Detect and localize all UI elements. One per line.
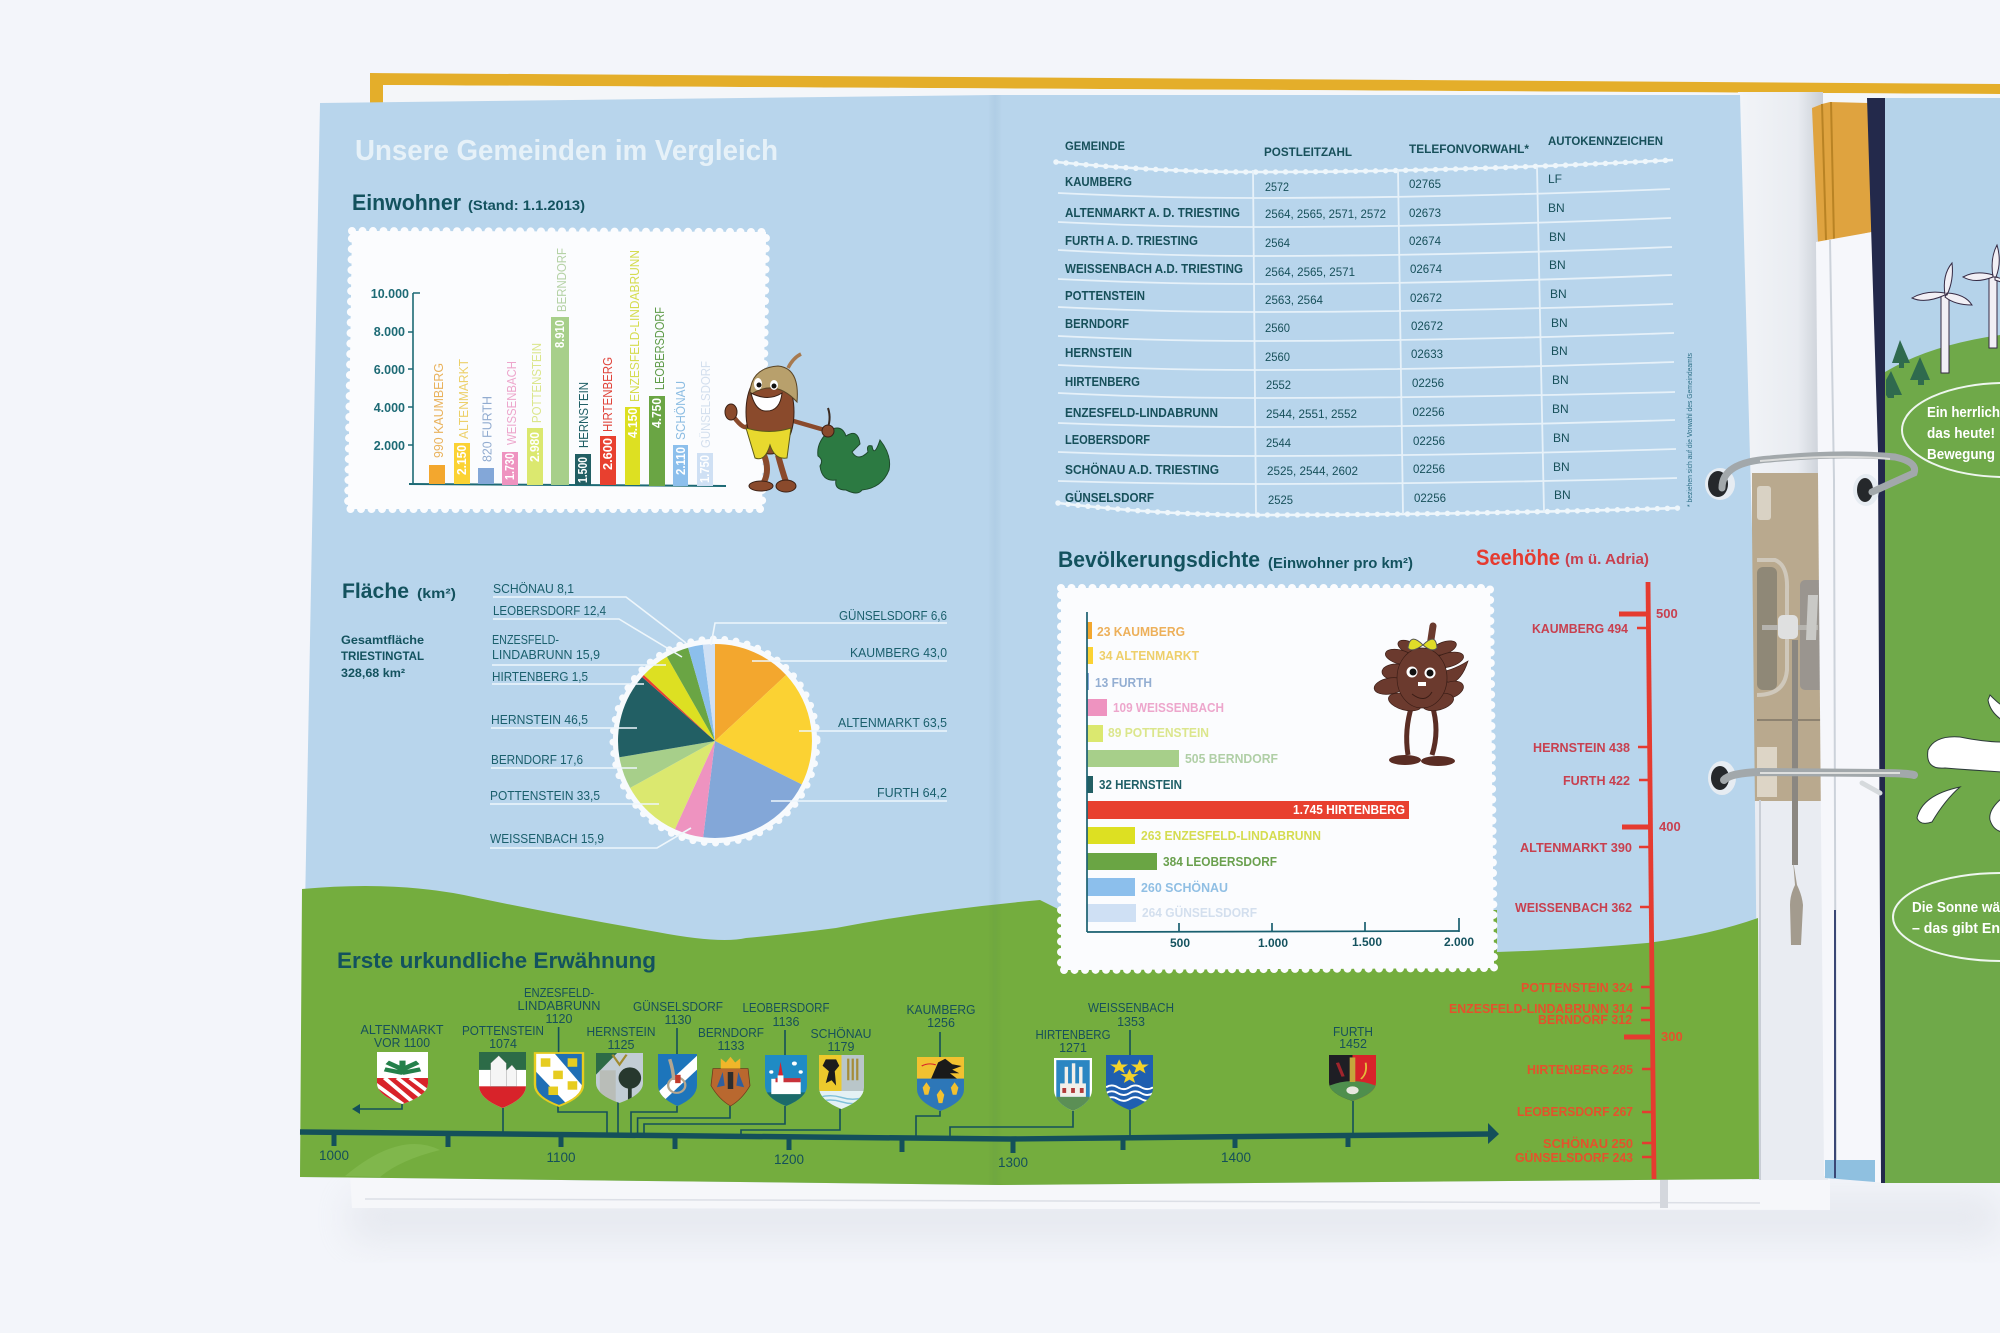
telephone codes: 02256 — [1414, 491, 1446, 505]
bar name labels: BERNDORF — [555, 248, 569, 312]
timeline labels: BERNDORF — [698, 1026, 764, 1040]
bar values: 1.750 — [698, 455, 712, 483]
legs — [764, 455, 786, 482]
density axis labels: 2.000 — [1444, 935, 1474, 949]
bar name labels: LEOBERSDORF — [653, 307, 667, 390]
panel: next page with wind turbines — [1885, 98, 2000, 1183]
altitude labels on hill: LEOBERSDORF 267 — [1517, 1105, 1633, 1119]
licence plates: BN — [1549, 258, 1566, 272]
icon: coat of arms Hernstein — [596, 1053, 643, 1103]
altitude labels on hill: POTTENSTEIN 324 — [1521, 981, 1633, 995]
callout: sunny day: das heute! — [1927, 425, 1995, 442]
timeline year labels: 1100 — [546, 1150, 576, 1165]
table header: TELEFONVORWAHL* — [1409, 142, 1529, 156]
density labels: 23 KAUMBERG — [1097, 625, 1185, 639]
telephone codes: 02673 — [1409, 206, 1441, 220]
pie labels: BERNDORF 17,6 — [491, 752, 583, 767]
icon: wind turbine — [1912, 263, 1972, 373]
altitude labels on sky: HERNSTEIN 438 — [1533, 741, 1630, 755]
footnote: * beziehen sich auf die Vorwahl des Gemeindeamts — [1685, 353, 1694, 507]
municipality names: LEOBERSDORF — [1065, 433, 1150, 447]
telephone codes: 02672 — [1410, 291, 1442, 305]
green hill — [300, 886, 1759, 1185]
licence plates: LF — [1548, 172, 1562, 186]
licence plates: BN — [1551, 344, 1568, 358]
bar values: 8.910 — [553, 320, 567, 348]
licence plates: BN — [1553, 431, 1570, 445]
municipality names: HIRTENBERG — [1065, 375, 1140, 389]
pie labels: HIRTENBERG 1,5 — [492, 669, 588, 684]
altitude labels on sky: ALTENMARKT 390 — [1520, 841, 1632, 855]
postal codes: 2564 — [1265, 236, 1290, 250]
density labels: 384 LEOBERSDORF — [1163, 855, 1277, 869]
municipality names: ALTENMARKT A. D. TRIESTING — [1065, 206, 1240, 220]
timeline labels: HERNSTEIN — [586, 1025, 656, 1039]
bar values: 4.750 — [650, 398, 664, 428]
bar values: 2.150 — [455, 445, 469, 475]
altitude labels on hill: ENZESFELD-LINDABRUNN 314 — [1449, 1002, 1633, 1016]
heading: Einwohner: (Stand: 1.1.2013) — [468, 197, 585, 213]
bar name labels: SCHÖNAU — [674, 381, 688, 440]
right pages stack — [1812, 98, 1886, 1183]
heading: Bevölkerungsdichte — [1058, 547, 1413, 572]
axis labels: 6.000 — [374, 363, 405, 377]
density labels: 109 WEISSENBACH — [1113, 701, 1224, 715]
timeline labels: 1271 — [1059, 1041, 1087, 1055]
altitude labels on hill: SCHÖNAU 250 — [1543, 1136, 1633, 1151]
municipality names: KAUMBERG — [1065, 175, 1132, 189]
telephone codes — [1409, 177, 1446, 505]
timeline labels: ENZESFELD- — [524, 986, 594, 1000]
telephone codes: 02256 — [1413, 462, 1445, 476]
timeline labels: VOR 1100 — [374, 1036, 430, 1050]
callout: sunny day — [1902, 383, 2000, 477]
table wavy rules — [1056, 160, 1680, 515]
timeline year labels — [319, 1148, 1251, 1170]
arms — [733, 416, 828, 431]
postal codes: 2560 — [1265, 350, 1290, 364]
altitude major labels: 300 — [1661, 1029, 1683, 1044]
bar name labels — [432, 248, 713, 462]
density labels: 1.745 HIRTENBERG — [1293, 803, 1405, 817]
icon: coat of arms Kaumberg — [917, 1057, 964, 1111]
timeline connectors — [360, 1027, 1353, 1138]
density bars — [1087, 622, 1409, 922]
bar name labels: POTTENSTEIN — [530, 343, 544, 423]
icon: coat of arms Altenmarkt — [377, 1052, 428, 1104]
chart: Seehöhe altitude scale — [1449, 545, 1683, 1179]
face — [754, 378, 762, 390]
bar values: 1.730 — [503, 453, 517, 480]
density labels: 264 GÜNSELSDORF — [1142, 905, 1257, 920]
axis labels: 4.000 — [374, 401, 405, 415]
pie labels: KAUMBERG 43,0 — [850, 645, 947, 660]
telephone codes: 02765 — [1409, 177, 1441, 191]
panel: table of municipalities — [1056, 134, 1680, 515]
telephone codes: 02674 — [1409, 234, 1441, 248]
bar values: 1.500 — [576, 457, 590, 483]
timeline labels: 1136 — [773, 1015, 799, 1029]
heading: Fläche: Fläche — [342, 580, 409, 603]
icon: coat of arms Berndorf — [711, 1057, 750, 1106]
timeline labels — [360, 986, 1373, 1055]
icon: coat of arms Schönau — [819, 1055, 864, 1109]
body — [746, 370, 794, 454]
postal codes: 2572 — [1265, 180, 1289, 194]
table header: GEMEINDE — [1065, 139, 1125, 153]
icon: pine cone mascot — [1373, 626, 1468, 766]
icon: binder ring lower — [1708, 761, 1914, 795]
postal codes: 2563, 2564 — [1265, 293, 1323, 307]
callout: solar energy — [1893, 873, 2000, 961]
altitude labels on hill: HIRTENBERG 285 — [1527, 1063, 1633, 1077]
heading: Einwohner — [352, 190, 585, 215]
timeline labels: FURTH — [1333, 1025, 1373, 1039]
table header: AUTOKENNZEICHEN — [1548, 134, 1663, 148]
timeline labels: 1120 — [546, 1012, 572, 1026]
licence plates: BN — [1553, 460, 1570, 474]
timeline — [300, 986, 1499, 1170]
bar name labels: 990 KAUMBERG — [432, 363, 446, 458]
licence plates: BN — [1554, 488, 1571, 502]
municipality names: POTTENSTEIN — [1065, 289, 1145, 303]
bar name labels: HERNSTEIN — [577, 382, 591, 448]
postal codes: 2564, 2565, 2571, 2572 — [1265, 207, 1386, 221]
bar name labels: WEISSENBACH — [505, 361, 519, 445]
icon: coat of arms Weissenbach — [1106, 1055, 1153, 1110]
postal codes: 2544 — [1266, 436, 1291, 450]
altitude major labels: 500 — [1656, 606, 1678, 621]
binder bottom white board — [350, 1175, 1830, 1210]
timeline labels: 1125 — [608, 1038, 634, 1052]
icon: wind turbine — [1963, 245, 2000, 348]
heading: Einwohner: Einwohner — [352, 190, 461, 215]
timeline labels: HIRTENBERG — [1036, 1028, 1110, 1042]
icon: coat of arms Pottenstein — [479, 1052, 526, 1108]
bar values: 2.980 — [528, 432, 542, 462]
timeline labels: KAUMBERG — [906, 1003, 976, 1017]
arrow: before 1100 — [352, 1104, 360, 1114]
panel: Einwohner bar chart — [348, 231, 766, 509]
icon: coat of arms Enzesfeld-Lindabrunn — [535, 1053, 583, 1106]
pie labels: LINDABRUNN 15,9 — [492, 647, 600, 662]
altitude labels on hill: GÜNSELSDORF 243 — [1515, 1150, 1633, 1165]
axis labels: 2.000 — [374, 439, 405, 453]
timeline labels: 1130 — [665, 1013, 691, 1027]
timeline year labels: 1300 — [998, 1155, 1028, 1170]
timeline labels: LINDABRUNN — [518, 999, 600, 1013]
binder mechanism — [1752, 473, 1830, 1180]
timeline labels: 1074 — [489, 1037, 517, 1051]
telephone codes: 02674 — [1410, 262, 1442, 276]
icon: coat of arms Günselsdorf — [658, 1054, 697, 1106]
timeline axis with arrow — [300, 1123, 1499, 1153]
telephone codes: 02256 — [1412, 405, 1445, 419]
altitude labels on sky: KAUMBERG 494 — [1532, 622, 1628, 636]
heading: Fläche: (km²) — [417, 585, 456, 601]
timeline labels: ALTENMARKT — [360, 1023, 444, 1037]
icon: coat of arms Furth — [1329, 1055, 1376, 1101]
municipality names: HERNSTEIN — [1065, 346, 1132, 360]
density labels: 34 ALTENMARKT — [1099, 649, 1199, 663]
timeline year labels: 1400 — [1221, 1150, 1251, 1165]
table header — [1065, 134, 1663, 159]
timeline labels: POTTENSTEIN — [462, 1024, 544, 1038]
shorts — [746, 428, 791, 459]
table header: POSTLEITZAHL — [1264, 145, 1352, 159]
heading: Seehöhe: Seehöhe — [1476, 545, 1560, 570]
icon: coat of arms Leobersdorf — [765, 1055, 807, 1106]
altitude labels on sky: WEISSENBACH 362 — [1515, 901, 1632, 915]
municipality names: SCHÖNAU A.D. TRIESTING — [1065, 462, 1219, 477]
postal codes: 2525, 2544, 2602 — [1267, 464, 1358, 478]
telephone codes: 02256 — [1413, 434, 1445, 448]
altitude labels on sky: FURTH 422 — [1563, 774, 1630, 788]
pie labels: SCHÖNAU 8,1 — [493, 581, 574, 596]
municipality names: GÜNSELSDORF — [1065, 490, 1154, 505]
density axis labels: 500 — [1170, 936, 1190, 950]
text block: Gesamtfläche — [341, 633, 424, 680]
licence plates: BN — [1550, 287, 1567, 301]
panel: Bevölkerungsdichte bar chart — [1061, 588, 1494, 970]
oak leaf — [818, 428, 890, 493]
altitude labels on sky — [1515, 622, 1632, 915]
density axis labels: 1.000 — [1258, 936, 1288, 950]
timeline labels: 1353 — [1117, 1015, 1145, 1029]
density labels: 89 POTTENSTEIN — [1108, 726, 1209, 740]
density labels: 263 ENZESFELD-LINDABRUNN — [1141, 829, 1321, 843]
timeline labels: 1133 — [718, 1039, 744, 1053]
bar name labels: HIRTENBERG — [601, 357, 615, 432]
heading: Bevölkerungsdichte: (Einwohner pro km²) — [1268, 556, 1413, 572]
pie labels: GÜNSELSDORF 6,6 — [839, 608, 947, 623]
altitude axis — [1619, 582, 1654, 1179]
bar values: 2.600 — [601, 438, 615, 470]
licence plates: BN — [1552, 402, 1569, 416]
altitude major labels: 400 — [1659, 819, 1681, 834]
timeline year labels: 1200 — [774, 1152, 804, 1167]
heading: Seehöhe — [1476, 545, 1649, 570]
pie labels: LEOBERSDORF 12,4 — [493, 603, 606, 618]
density axes — [1087, 612, 1459, 932]
heading: Fläche — [342, 580, 456, 603]
binder cover strip — [370, 73, 2000, 487]
density axis labels: 1.500 — [1352, 935, 1382, 949]
altitude labels on hill — [1449, 981, 1633, 1165]
axis — [408, 293, 726, 486]
telephone codes: 02633 — [1411, 347, 1443, 361]
postal codes: 2552 — [1266, 378, 1291, 392]
licence plates: BN — [1552, 373, 1569, 387]
title: Unsere Gemeinden im Vergleich — [355, 135, 778, 167]
pie labels: FURTH 64,2 — [877, 785, 947, 800]
density labels: 260 SCHÖNAU — [1141, 880, 1228, 895]
postal codes: 2544, 2551, 2552 — [1266, 407, 1357, 421]
text block: Gesamtfläche: Gesamtfläche — [341, 633, 424, 647]
heading: Seehöhe: (m ü. Adria) — [1565, 552, 1649, 568]
bar name labels: ENZESFELD-LINDABRUNN — [628, 250, 642, 402]
icon: binder ring upper — [1705, 455, 1915, 506]
municipality names: BERNDORF — [1065, 317, 1129, 331]
density labels: 13 FURTH — [1095, 676, 1152, 690]
municipality names: ENZESFELD-LINDABRUNN — [1065, 406, 1218, 420]
timeline labels: WEISSENBACH — [1088, 1001, 1174, 1015]
licence plates: BN — [1548, 201, 1565, 215]
axis labels: 10.000 — [371, 287, 409, 301]
pie chart: Fläche — [490, 581, 947, 848]
timeline labels: 1452 — [1339, 1037, 1367, 1051]
timeline labels: 1256 — [927, 1016, 955, 1030]
licence plates — [1548, 172, 1571, 502]
timeline labels: LEOBERSDORF — [742, 1001, 830, 1015]
bar values — [455, 320, 712, 483]
bar values: 4.150 — [626, 408, 640, 438]
postal codes — [1265, 180, 1386, 507]
hill — [1885, 335, 2000, 1183]
density labels — [1095, 625, 1405, 920]
bar values: 2.110 — [674, 447, 688, 475]
postal codes: 2525 — [1268, 493, 1293, 507]
timeline year labels: 1000 — [319, 1148, 349, 1163]
heading: Erste urkundliche Erwähnung: Erste urkundliche Erwähnung — [337, 948, 656, 973]
timeline labels: SCHÖNAU — [810, 1027, 872, 1041]
altitude major labels — [1656, 606, 1683, 1044]
pie labels: HERNSTEIN 46,5 — [491, 712, 588, 727]
bars — [429, 317, 713, 486]
telephone codes: 02256 — [1412, 376, 1444, 390]
licence plates: BN — [1551, 316, 1568, 330]
timeline labels: GÜNSELSDORF — [633, 1000, 723, 1014]
heading: Bevölkerungsdichte: Bevölkerungsdichte — [1058, 547, 1260, 572]
density labels: 32 HERNSTEIN — [1099, 778, 1182, 792]
axis labels — [371, 287, 409, 453]
icon: fir trees — [1886, 340, 1930, 398]
cap — [750, 366, 797, 402]
icon: coat of arms Hirtenberg — [1054, 1058, 1092, 1111]
municipality names: FURTH A. D. TRIESTING — [1065, 234, 1198, 248]
timeline labels: 1179 — [828, 1040, 854, 1054]
bar name labels: 820 FURTH — [480, 396, 494, 462]
telephone codes: 02672 — [1411, 319, 1443, 333]
municipality names: WEISSENBACH A.D. TRIESTING — [1065, 262, 1243, 276]
pie labels: ALTENMARKT 63,5 — [838, 715, 947, 730]
postal codes: 2564, 2565, 2571 — [1265, 265, 1355, 279]
licence plates: BN — [1549, 230, 1566, 244]
icon: white cloud shapes — [1917, 695, 2000, 832]
text block: Gesamtfläche: TRIESTINGTAL — [341, 649, 424, 663]
altitude labels on hill: BERNDORF 312 — [1538, 1013, 1632, 1027]
density axis labels — [1170, 935, 1474, 950]
pie labels — [490, 581, 947, 846]
density labels: 505 BERNDORF — [1185, 752, 1278, 766]
axis labels: 8.000 — [374, 325, 405, 339]
pie labels: WEISSENBACH 15,9 — [490, 831, 604, 846]
binder shadow — [350, 1195, 2000, 1240]
pie labels: ENZESFELD- — [492, 632, 559, 647]
text block: Gesamtfläche: 328,68 km² — [341, 666, 405, 680]
icon: acorn mascot with oak leaf — [725, 354, 890, 493]
leader lines — [490, 597, 947, 848]
bar name labels: ALTENMARKT — [457, 359, 471, 439]
postal codes: 2560 — [1265, 321, 1290, 335]
municipality names — [1065, 175, 1243, 505]
table rules — [1058, 167, 1677, 514]
bar name labels: GÜNSELSDORF — [699, 361, 713, 448]
panel: open folded page background — [300, 95, 1759, 1185]
pie labels: POTTENSTEIN 33,5 — [490, 788, 600, 803]
